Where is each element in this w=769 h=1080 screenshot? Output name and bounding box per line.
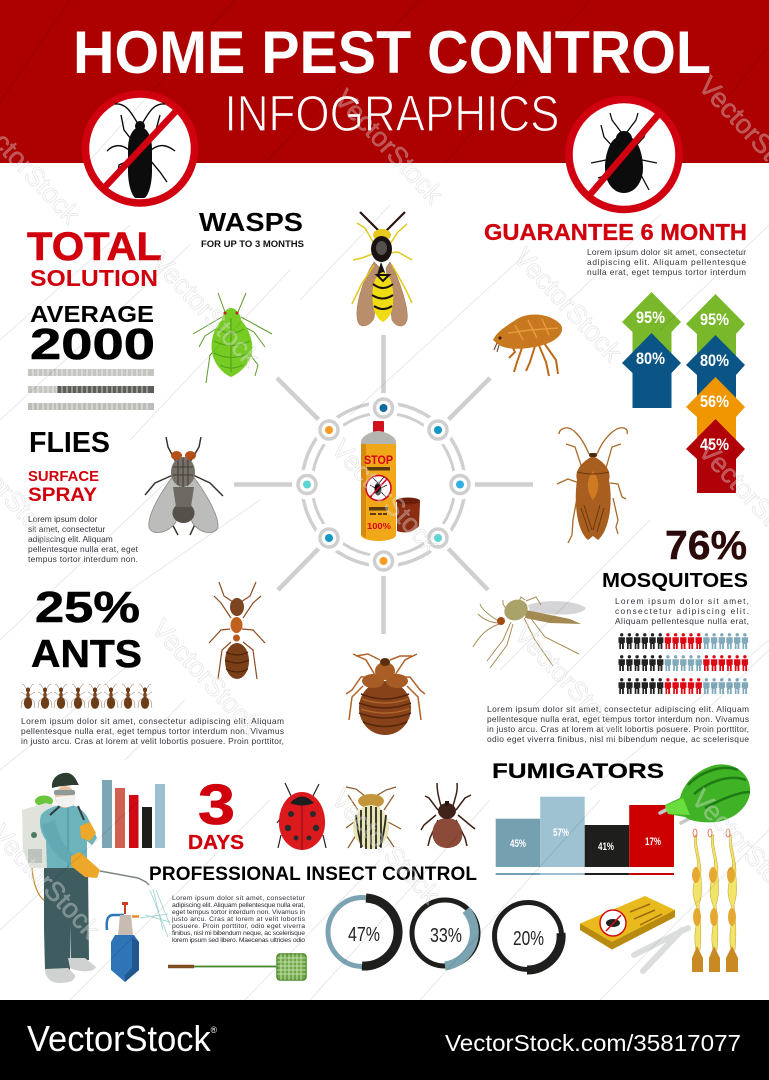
insect: bedbug [346,654,425,735]
panel: fumigators: FUMIGATORS [492,760,664,783]
subtitle: INFOGRAPHICS [224,85,560,142]
panel: mosquitoes: Lorem ipsum dolor sit amet, [615,596,749,606]
footer band: VectorStock [27,1018,219,1059]
insect: cockroach [557,428,627,543]
chart: donut 20%: 20% [513,928,544,950]
panel: ants stat: 25% [35,583,140,632]
panel: wasps heading: WASPS [199,207,303,237]
panel: mosquitoes: 76% [665,522,747,568]
chart: arrows left column: 95% [636,308,665,327]
text block: professional: posuere. Proin porttitor, odio eget viverra [172,923,305,930]
chart: fumigator bars: 57% [553,827,569,839]
insect: ant [209,582,265,679]
insect: aphid [193,293,272,383]
radial diagram [234,335,533,634]
icon: fly swatter [168,954,306,980]
text block: professional: justo arcu. Cras at lorem at velit lobortis [171,916,306,923]
watermark overlay: VectorStock [146,614,266,740]
panel: flies: Lorem ipsum dolor [28,514,98,524]
icon: fly tape strips [692,829,738,972]
icon: spray mist [140,889,170,937]
chart: fumigator bars: 41% [598,841,614,853]
icon: pump sprayer [107,902,139,982]
panel: mosquitoes: consectetur adipiscing elit. [615,606,749,616]
text block: professional: lorem ipsum sed libero. Maecenas ultricies odio [172,937,305,944]
panel: flies: sit amet, consectetur [28,524,105,534]
panel: mosquitoes: pellentesque nulla erat, eget tempus tortor interdum non. Vivamus [487,714,749,724]
stat: 3 days: 3 [198,773,235,837]
watermark overlay: VectorStock [326,434,446,560]
panel: guarantee: nulla erat, eget tempus tortor interdum [587,267,746,277]
heading: professional insect control: PROFESSIONAL INSECT CONTROL [149,864,477,885]
insect: flea [493,314,562,376]
icon: spray can: STOP [364,455,393,467]
nodes [292,393,475,576]
chart: arrows left column: 80% [636,349,665,368]
panel: flies: FLIES [29,427,110,459]
panel: fumigators [492,760,674,875]
panel: ants stat: in justo arcu. Cras at lorem at velit lobortis posuere. Proin porttitor, [21,736,284,746]
panel: guarantee: GUARANTEE 6 MONTH [484,219,747,245]
panel: mosquitoes [487,522,749,744]
panel: guarantee: adipiscing elit. Aliquam pellentesque [587,257,746,267]
chart: donut 33% [412,900,478,966]
chart: fumigator bars: 45% [510,838,526,850]
panel: total solution: AVERAGE [30,301,154,327]
chart: small bars [102,780,165,848]
insect: wasp [352,212,412,326]
panel: ants stat: ANTS [31,633,142,676]
panel: total solution [27,225,162,411]
panel: flies: adipiscing elit. Aliquam [28,534,113,544]
title: HOME PEST CONTROL [73,19,711,86]
panel: wasps heading [199,207,304,250]
panel: total solution: TOTAL [27,225,162,269]
watermark overlay: VectorStock [329,84,449,210]
panel: guarantee [484,219,747,277]
icon: no bug badge [569,100,679,210]
panel: flies: SURFACE [28,468,99,485]
panel: wasps heading: FOR UP TO 3 MONTHS [201,239,304,250]
panel: total solution: 2000 [30,320,155,369]
watermark overlay: VectorStock [326,784,446,910]
icon: no cockroach badge [86,94,194,203]
chart: arrows right column: 80% [700,351,729,370]
icon: spray can: 100% [367,521,391,531]
panel: ants stat: pellentesque nulla erat, eget tempus tortor interdum non. Vivamus [21,726,284,736]
footer band: ® [211,1025,217,1035]
illustration: exterminator [22,773,149,983]
insect: ladybug [277,783,326,850]
stat: 3 days [188,773,244,854]
stat: 3 days: DAYS [188,832,244,854]
text block: professional [171,895,306,944]
watermark overlay: VectorStock [509,619,629,745]
panel: mosquitoes: Aliquam pellentesque nulla erat, [615,616,749,626]
text block: professional: adipiscing elit. Aliquam pellentesque nulla erat, [172,902,305,909]
panel: flies: tempus tortor interdum non. [28,554,138,564]
ant row [21,684,152,709]
panel: flies: pellentesque nulla erat, eget [28,544,139,554]
panel: mosquitoes: in justo arcu. Cras at lorem at velit lobortis posuere. Proin porttitor, [487,724,749,734]
people chart [618,633,748,694]
chart: arrows left column [622,292,681,408]
text block: professional: eget tempus tortor interdum non. Vivamus in [172,909,305,916]
chart: fumigator bars [496,797,674,875]
chart: arrows right column: 95% [700,310,729,329]
panel: flies [28,427,139,564]
panel: total solution: SOLUTION [30,265,158,291]
chart: arrows right column: 45% [700,435,729,454]
chart: donut 47% [328,898,398,966]
icon: plug-in fumigator [660,764,750,823]
insect: colorado beetle [346,787,401,849]
panel: mosquitoes: Lorem ipsum dolor sit amet, consectetur adipiscing elit. Aliquam [487,704,749,714]
chart: arrows right column [686,294,745,493]
panel: mosquitoes: MOSQUITOES [602,570,748,592]
footer band: VectorStock.com/35817077 [445,1030,741,1056]
watermark overlay: VectorStock [508,242,628,368]
text block: professional: Lorem ipsum dolor sit amet, consectetur [172,895,306,902]
icon: insect coil box and sticks [580,896,688,971]
chart: arrows right column: 56% [700,392,729,411]
panel: ants stat: Lorem ipsum dolor sit amet, consectetur adipiscing elit. Aliquam [21,716,284,726]
insect: tick [421,783,475,848]
chart: donut 47%: 47% [348,924,380,946]
chart: fumigator bars: 17% [645,836,661,848]
footer band [0,1000,769,1080]
panel: guarantee: Lorem ipsum dolor sit amet, consectetur [587,247,746,257]
chart: donut 33%: 33% [430,925,462,947]
icon: spray can [361,421,420,541]
watermark overlay: VectorStock [146,247,266,373]
insect: fly [145,437,223,535]
panel: flies: SPRAY [28,484,97,506]
chart: donut 20% [494,902,562,970]
text block: professional: finibus, nisl mi bibendum neque, ac scelerisque [172,930,305,937]
insect: mosquito [473,596,586,668]
progress bars [28,368,154,411]
header band [0,0,769,163]
panel: ants stat [21,583,284,746]
panel: mosquitoes: odio eget viverra finibus, nisl mi bibendum neque, ac scelerisque [487,734,749,744]
